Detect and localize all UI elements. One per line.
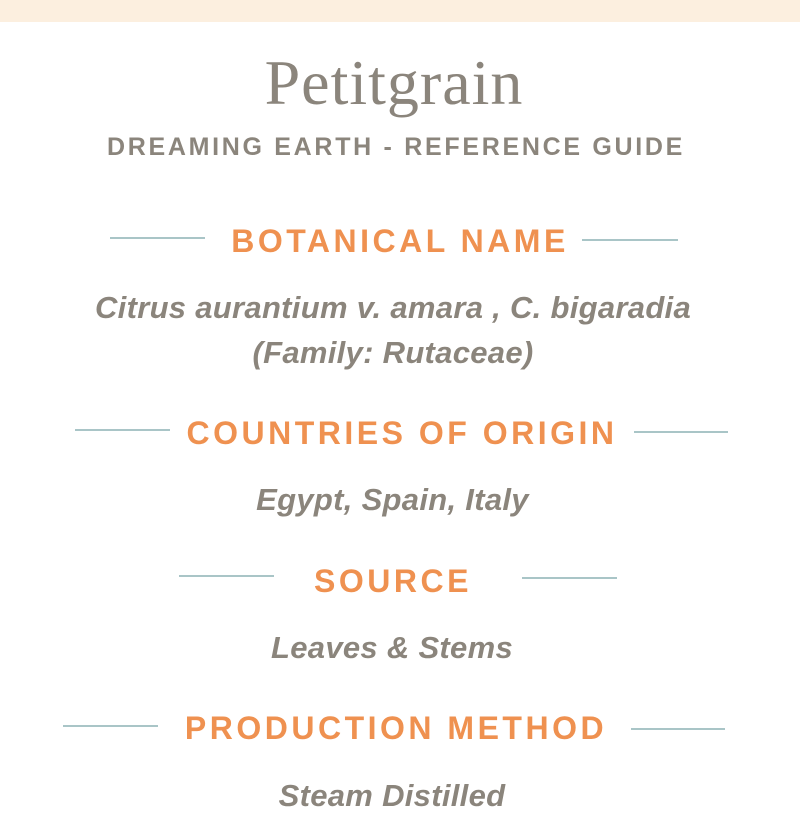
heading: botanical name: BOTANICAL NAME	[231, 223, 569, 259]
text: countries: Egypt, Spain, Italy	[256, 482, 529, 517]
section: countries of origin	[75, 415, 728, 517]
section: source	[179, 563, 617, 665]
text: source: Leaves & Stems	[271, 630, 513, 665]
top band	[0, 0, 800, 22]
text: botanical name: (Family: Rutaceae)	[252, 335, 534, 370]
text: botanical name: Citrus aurantium v. amara , C. bigaradia	[95, 290, 691, 325]
text: botanical name	[95, 290, 691, 370]
heading: source: SOURCE	[314, 563, 472, 599]
section: production method	[63, 710, 725, 813]
subtitle: DREAMING EARTH - REFERENCE GUIDE	[107, 133, 685, 161]
heading: production method: PRODUCTION METHOD	[185, 710, 607, 746]
heading: countries of origin: COUNTRIES OF ORIGIN	[187, 415, 617, 451]
text: production method: Steam Distilled	[279, 778, 505, 813]
section: botanical name	[95, 223, 691, 370]
title: Petitgrain	[265, 47, 523, 118]
